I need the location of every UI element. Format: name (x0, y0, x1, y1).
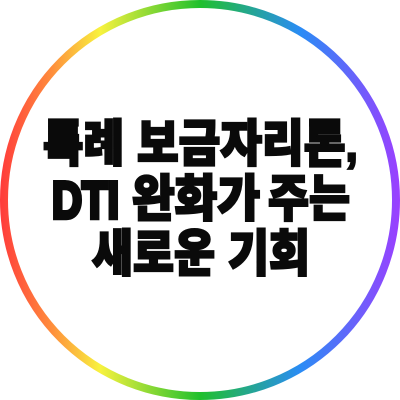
title (43, 116, 358, 282)
title line 2: 완화가 (132, 171, 260, 227)
title line 3 (92, 226, 310, 282)
title line 3: 새로운 (92, 226, 215, 282)
title line 2: 주는 (268, 171, 350, 227)
title line 3: 기회 (228, 226, 310, 282)
title line 1 (43, 116, 358, 172)
title line 2 (52, 171, 350, 230)
title line 2: DTI (52, 172, 119, 230)
title line 1: 보금자리론, (137, 116, 358, 172)
title line 1: 특례 (43, 116, 124, 172)
